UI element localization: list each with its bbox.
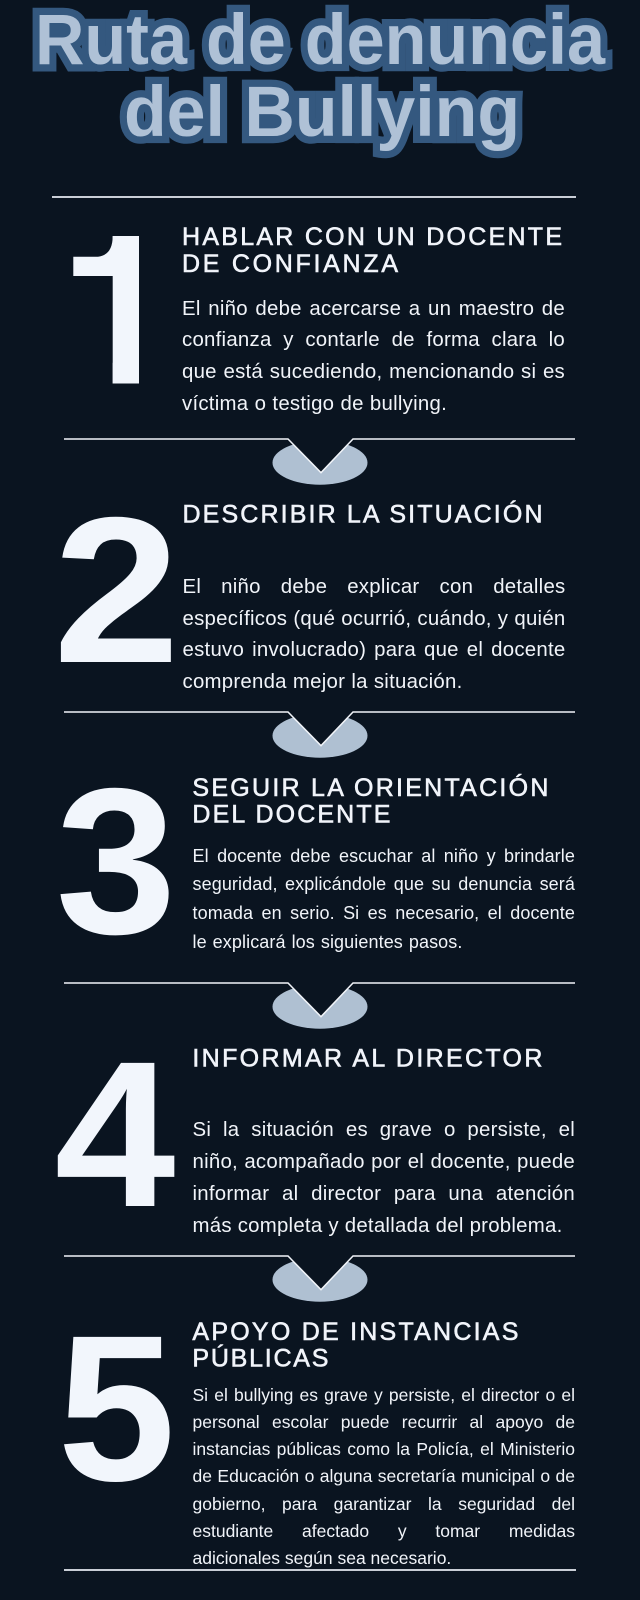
body text 4	[192, 1119, 575, 1237]
body text 5	[192, 1385, 575, 1568]
title	[32, 1, 612, 158]
body text 1: El niño debe acercarse a un maestro de	[182, 298, 565, 320]
body text 2: específicos (qué ocurrió, cuándo, y quién	[182, 608, 566, 630]
panel: paso 2	[53, 475, 566, 707]
body text 3	[192, 846, 575, 952]
body text 4: informar al director para una atención	[192, 1183, 575, 1205]
body text 3: seguridad, explicándole que su denuncia será	[192, 874, 575, 894]
body text 4: más completa y detallada del problema.	[192, 1215, 562, 1237]
body text 5: personal escolar puede recurrir al apoyo de	[192, 1412, 575, 1432]
body text 1	[182, 298, 565, 415]
title: Ruta de denuncia	[35, 1, 605, 80]
number 2: 2	[53, 475, 180, 707]
bottom divider	[64, 1569, 576, 1571]
heading 1: HABLAR CON UN DOCENTE	[182, 223, 562, 251]
number 4: 4	[54, 1019, 176, 1251]
body text 4: Si la situación es grave o persiste, el	[192, 1119, 575, 1141]
body text 4: niño, acompañado por el docente, puede	[192, 1151, 575, 1173]
body text 5: Si el bullying es grave y persiste, el director o el	[192, 1385, 575, 1405]
panel: paso 5	[58, 1293, 575, 1568]
body text 5: adicionales según sea necesario.	[192, 1548, 451, 1568]
number 3: 3	[56, 746, 176, 978]
body text 1: víctima o testigo de bullying.	[182, 393, 447, 415]
arrow 4	[64, 1255, 575, 1302]
body text 5: gobierno, para garantizar la seguridad del	[192, 1494, 575, 1514]
heading 1: DE CONFIANZA	[182, 250, 398, 278]
body text 5: estudiante afectado y tomar medidas	[192, 1521, 575, 1541]
body text 5: instancias públicas como la Policía, el Ministerio	[192, 1439, 575, 1459]
number 1	[73, 236, 139, 384]
body text 1: confianza y contarle de forma clara lo	[182, 329, 565, 351]
heading 5	[192, 1318, 518, 1373]
body text 1: que está sucediendo, mencionando si es	[182, 361, 565, 383]
body text 2: comprenda mejor la situación.	[182, 671, 462, 693]
panel: paso 3	[56, 746, 575, 978]
arrow 1	[64, 438, 575, 485]
body text 5: de Educación o alguna secretaría municipal o de	[192, 1466, 575, 1486]
heading 2: DESCRIBIR LA SITUACIÓN	[182, 500, 542, 529]
body text 2	[182, 576, 566, 693]
heading 3	[192, 773, 548, 829]
arrow 3	[64, 982, 575, 1029]
number 5: 5	[58, 1293, 176, 1525]
top divider	[52, 196, 576, 198]
heading 1	[182, 223, 562, 278]
body text 3: tomada en serio. Si es necesario, el docente	[192, 903, 575, 923]
body text 2: El niño debe explicar con detalles	[182, 576, 566, 598]
arrow 2	[64, 711, 575, 758]
body text 3: El docente debe escuchar al niño y brindarle	[192, 846, 575, 866]
panel: paso 1	[73, 223, 565, 415]
heading 4: INFORMAR AL DIRECTOR	[192, 1045, 542, 1073]
body text 3: le explicará los siguientes pasos.	[192, 932, 462, 952]
title: del Bullying	[124, 73, 520, 152]
number 1: 1	[67, 197, 183, 429]
panel: paso 4	[54, 1019, 575, 1251]
heading 5: PÚBLICAS	[192, 1344, 328, 1373]
body text 2: estuvo involucrado) para que el docente	[182, 639, 566, 661]
heading 3: SEGUIR LA ORIENTACIÓN	[192, 773, 548, 802]
heading 3: DEL DOCENTE	[192, 801, 390, 829]
heading 5: APOYO DE INSTANCIAS	[192, 1318, 518, 1346]
